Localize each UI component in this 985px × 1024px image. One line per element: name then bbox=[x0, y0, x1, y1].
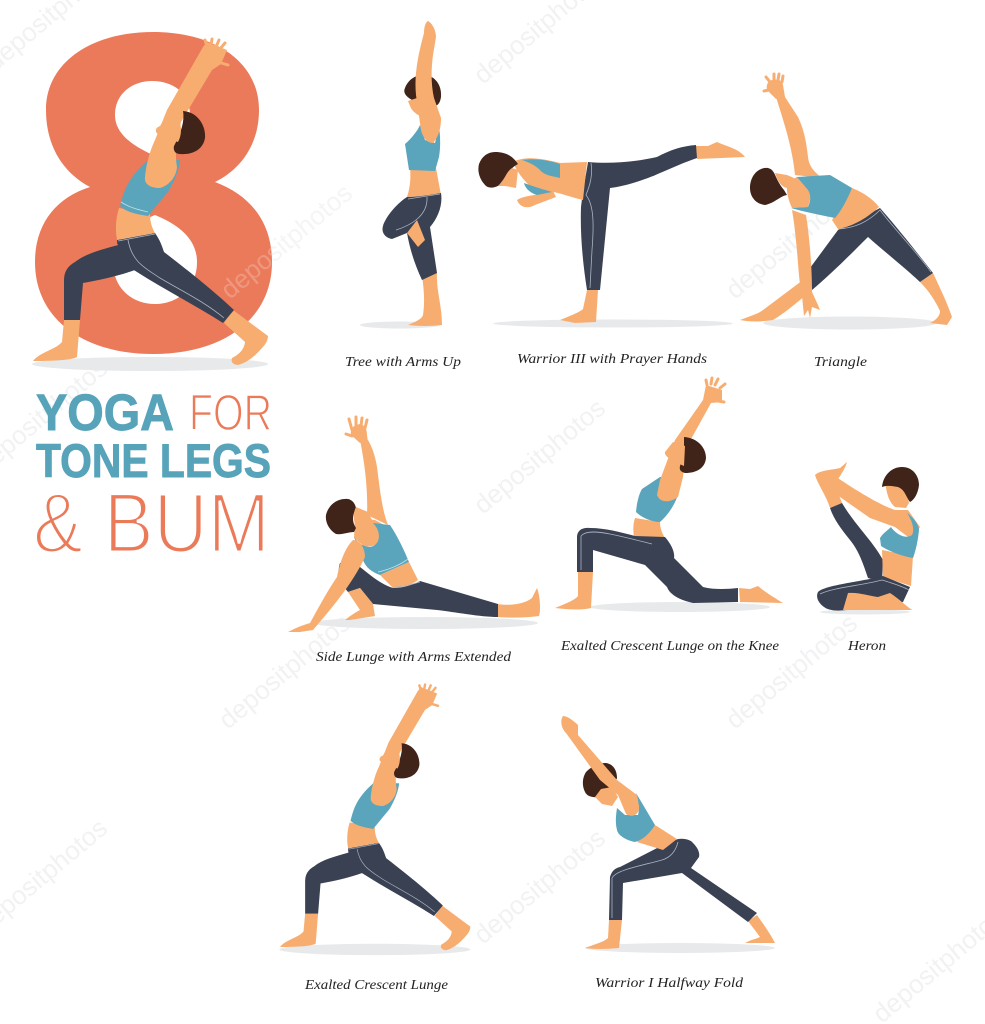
floor shadow bbox=[763, 316, 937, 330]
big number 8 bbox=[35, 32, 272, 354]
figure: warrior I halfway fold bbox=[561, 716, 775, 953]
caption: triangle: Triangle bbox=[814, 354, 867, 369]
leggings bbox=[339, 563, 498, 617]
figure: side lunge with arms extended bbox=[288, 417, 540, 632]
caption: exalted crescent lunge: Exalted Crescent Lunge bbox=[304, 977, 448, 992]
caption: tree with arms up: Tree with Arms Up bbox=[345, 354, 461, 369]
back of shoulder bbox=[354, 517, 388, 547]
supporting arm and hand bbox=[288, 540, 365, 632]
face bbox=[595, 787, 618, 806]
hair bbox=[394, 743, 419, 778]
right lower leg and foot bbox=[745, 915, 775, 943]
waist bbox=[380, 562, 418, 588]
face bbox=[408, 95, 430, 118]
sports top bbox=[354, 523, 409, 575]
title line 3: & BUM bbox=[33, 476, 270, 570]
leggings bbox=[810, 208, 933, 290]
caption: heron: Heron bbox=[847, 638, 886, 653]
standing lower leg and foot bbox=[408, 272, 442, 326]
floor shadow bbox=[585, 943, 775, 953]
foot on thigh bbox=[407, 220, 425, 247]
standing foot bbox=[560, 290, 598, 323]
floor shadow bbox=[32, 357, 268, 371]
figure: heron bbox=[815, 462, 920, 614]
hair bbox=[478, 152, 518, 188]
extended foot bbox=[498, 588, 540, 618]
figure: warrior crescent lunge (hero) bbox=[32, 39, 268, 371]
arm and hand bbox=[145, 42, 227, 188]
figure: tree with arms up bbox=[360, 21, 442, 328]
leggings bbox=[581, 145, 697, 290]
raised arm and hand bbox=[776, 97, 822, 178]
watermark text: depositphotos bbox=[720, 178, 863, 305]
title line 2: TONE LEGS bbox=[36, 434, 271, 487]
sports top bbox=[522, 159, 560, 195]
title line 1: YOGA bbox=[36, 384, 174, 441]
face bbox=[498, 168, 518, 188]
caption: crescent lunge on knee: Exalted Crescent Lunge on the Knee bbox=[560, 638, 779, 653]
torso bbox=[347, 822, 379, 848]
arm and hand bbox=[561, 716, 639, 816]
torso bbox=[633, 518, 665, 538]
leggings bbox=[609, 839, 757, 922]
hair bbox=[583, 763, 617, 797]
leggings bbox=[577, 528, 738, 603]
floor shadow bbox=[360, 322, 440, 328]
face bbox=[885, 482, 909, 508]
sports top bbox=[120, 160, 180, 216]
sports top bbox=[880, 513, 919, 558]
hair bbox=[404, 75, 441, 106]
raised arm and hand bbox=[360, 440, 388, 525]
lower arm and hand bbox=[792, 210, 820, 318]
back foot bbox=[739, 586, 783, 603]
sports top bbox=[791, 175, 852, 218]
hair bbox=[174, 111, 205, 154]
waist bbox=[832, 188, 879, 229]
watermark text: depositphotos bbox=[720, 608, 863, 735]
face bbox=[380, 749, 400, 769]
watermark text: depositphotos bbox=[468, 823, 611, 950]
caption: warrior III: Warrior III with Prayer Hands bbox=[517, 351, 707, 366]
arm and hand bbox=[415, 21, 441, 143]
figure: triangle bbox=[740, 74, 952, 330]
figure: warrior III with prayer hands bbox=[478, 142, 745, 328]
leggings bbox=[305, 852, 363, 914]
sports top bbox=[616, 793, 655, 842]
floor shadow bbox=[279, 944, 470, 955]
floor shadow bbox=[312, 617, 538, 629]
title bbox=[33, 384, 272, 570]
hair bbox=[882, 467, 919, 502]
torso bbox=[407, 168, 441, 197]
sports top bbox=[350, 783, 399, 829]
caption: warrior I halfway fold: Warrior I Halfway Fold bbox=[595, 975, 743, 990]
bent lower leg and foot bbox=[345, 588, 375, 620]
waist bbox=[637, 825, 677, 850]
figure: exalted crescent lunge bbox=[279, 685, 470, 955]
floor shadow bbox=[493, 320, 733, 328]
leggings bbox=[382, 193, 441, 280]
title: FOR bbox=[189, 384, 272, 441]
face bbox=[775, 173, 794, 188]
feet and lower legs bbox=[280, 914, 318, 947]
torso bbox=[513, 158, 587, 200]
face bbox=[354, 507, 372, 530]
face bbox=[156, 118, 181, 142]
floor shadow bbox=[590, 602, 770, 612]
floor shadow bbox=[820, 610, 910, 614]
face bbox=[665, 442, 685, 466]
hair bbox=[680, 437, 706, 473]
hero watermark overlay: depositphotos bbox=[215, 178, 358, 305]
back and shoulder bbox=[787, 177, 812, 208]
raised foot and calf bbox=[815, 462, 847, 508]
figure: exalted crescent lunge on the knee bbox=[555, 378, 783, 612]
hair bbox=[750, 168, 787, 205]
forearm and hands bbox=[517, 191, 556, 207]
bottom leggings bbox=[817, 576, 910, 611]
feet and lower legs bbox=[33, 320, 80, 361]
seated foot bbox=[843, 593, 912, 610]
front lower leg and foot bbox=[555, 572, 593, 610]
hair bbox=[326, 499, 356, 534]
sports top bbox=[636, 477, 679, 522]
left lower leg and foot bbox=[585, 920, 622, 949]
raised leggings bbox=[830, 503, 883, 582]
watermark text: depositphotos bbox=[468, 393, 611, 520]
watermark text: depositphotos bbox=[213, 608, 356, 735]
back leg and foot bbox=[920, 273, 952, 325]
torso bbox=[116, 208, 155, 240]
watermark text: depositphotos bbox=[215, 178, 358, 305]
arm and hand bbox=[657, 385, 722, 501]
torso bbox=[882, 550, 913, 586]
leggings bbox=[64, 245, 135, 320]
arm and back bbox=[827, 474, 920, 540]
front leg and foot bbox=[740, 280, 812, 322]
sports top bbox=[405, 125, 440, 171]
raised foot bbox=[695, 142, 745, 159]
arm and hand bbox=[371, 687, 437, 806]
caption: side lunge: Side Lunge with Arms Extended bbox=[316, 649, 511, 664]
